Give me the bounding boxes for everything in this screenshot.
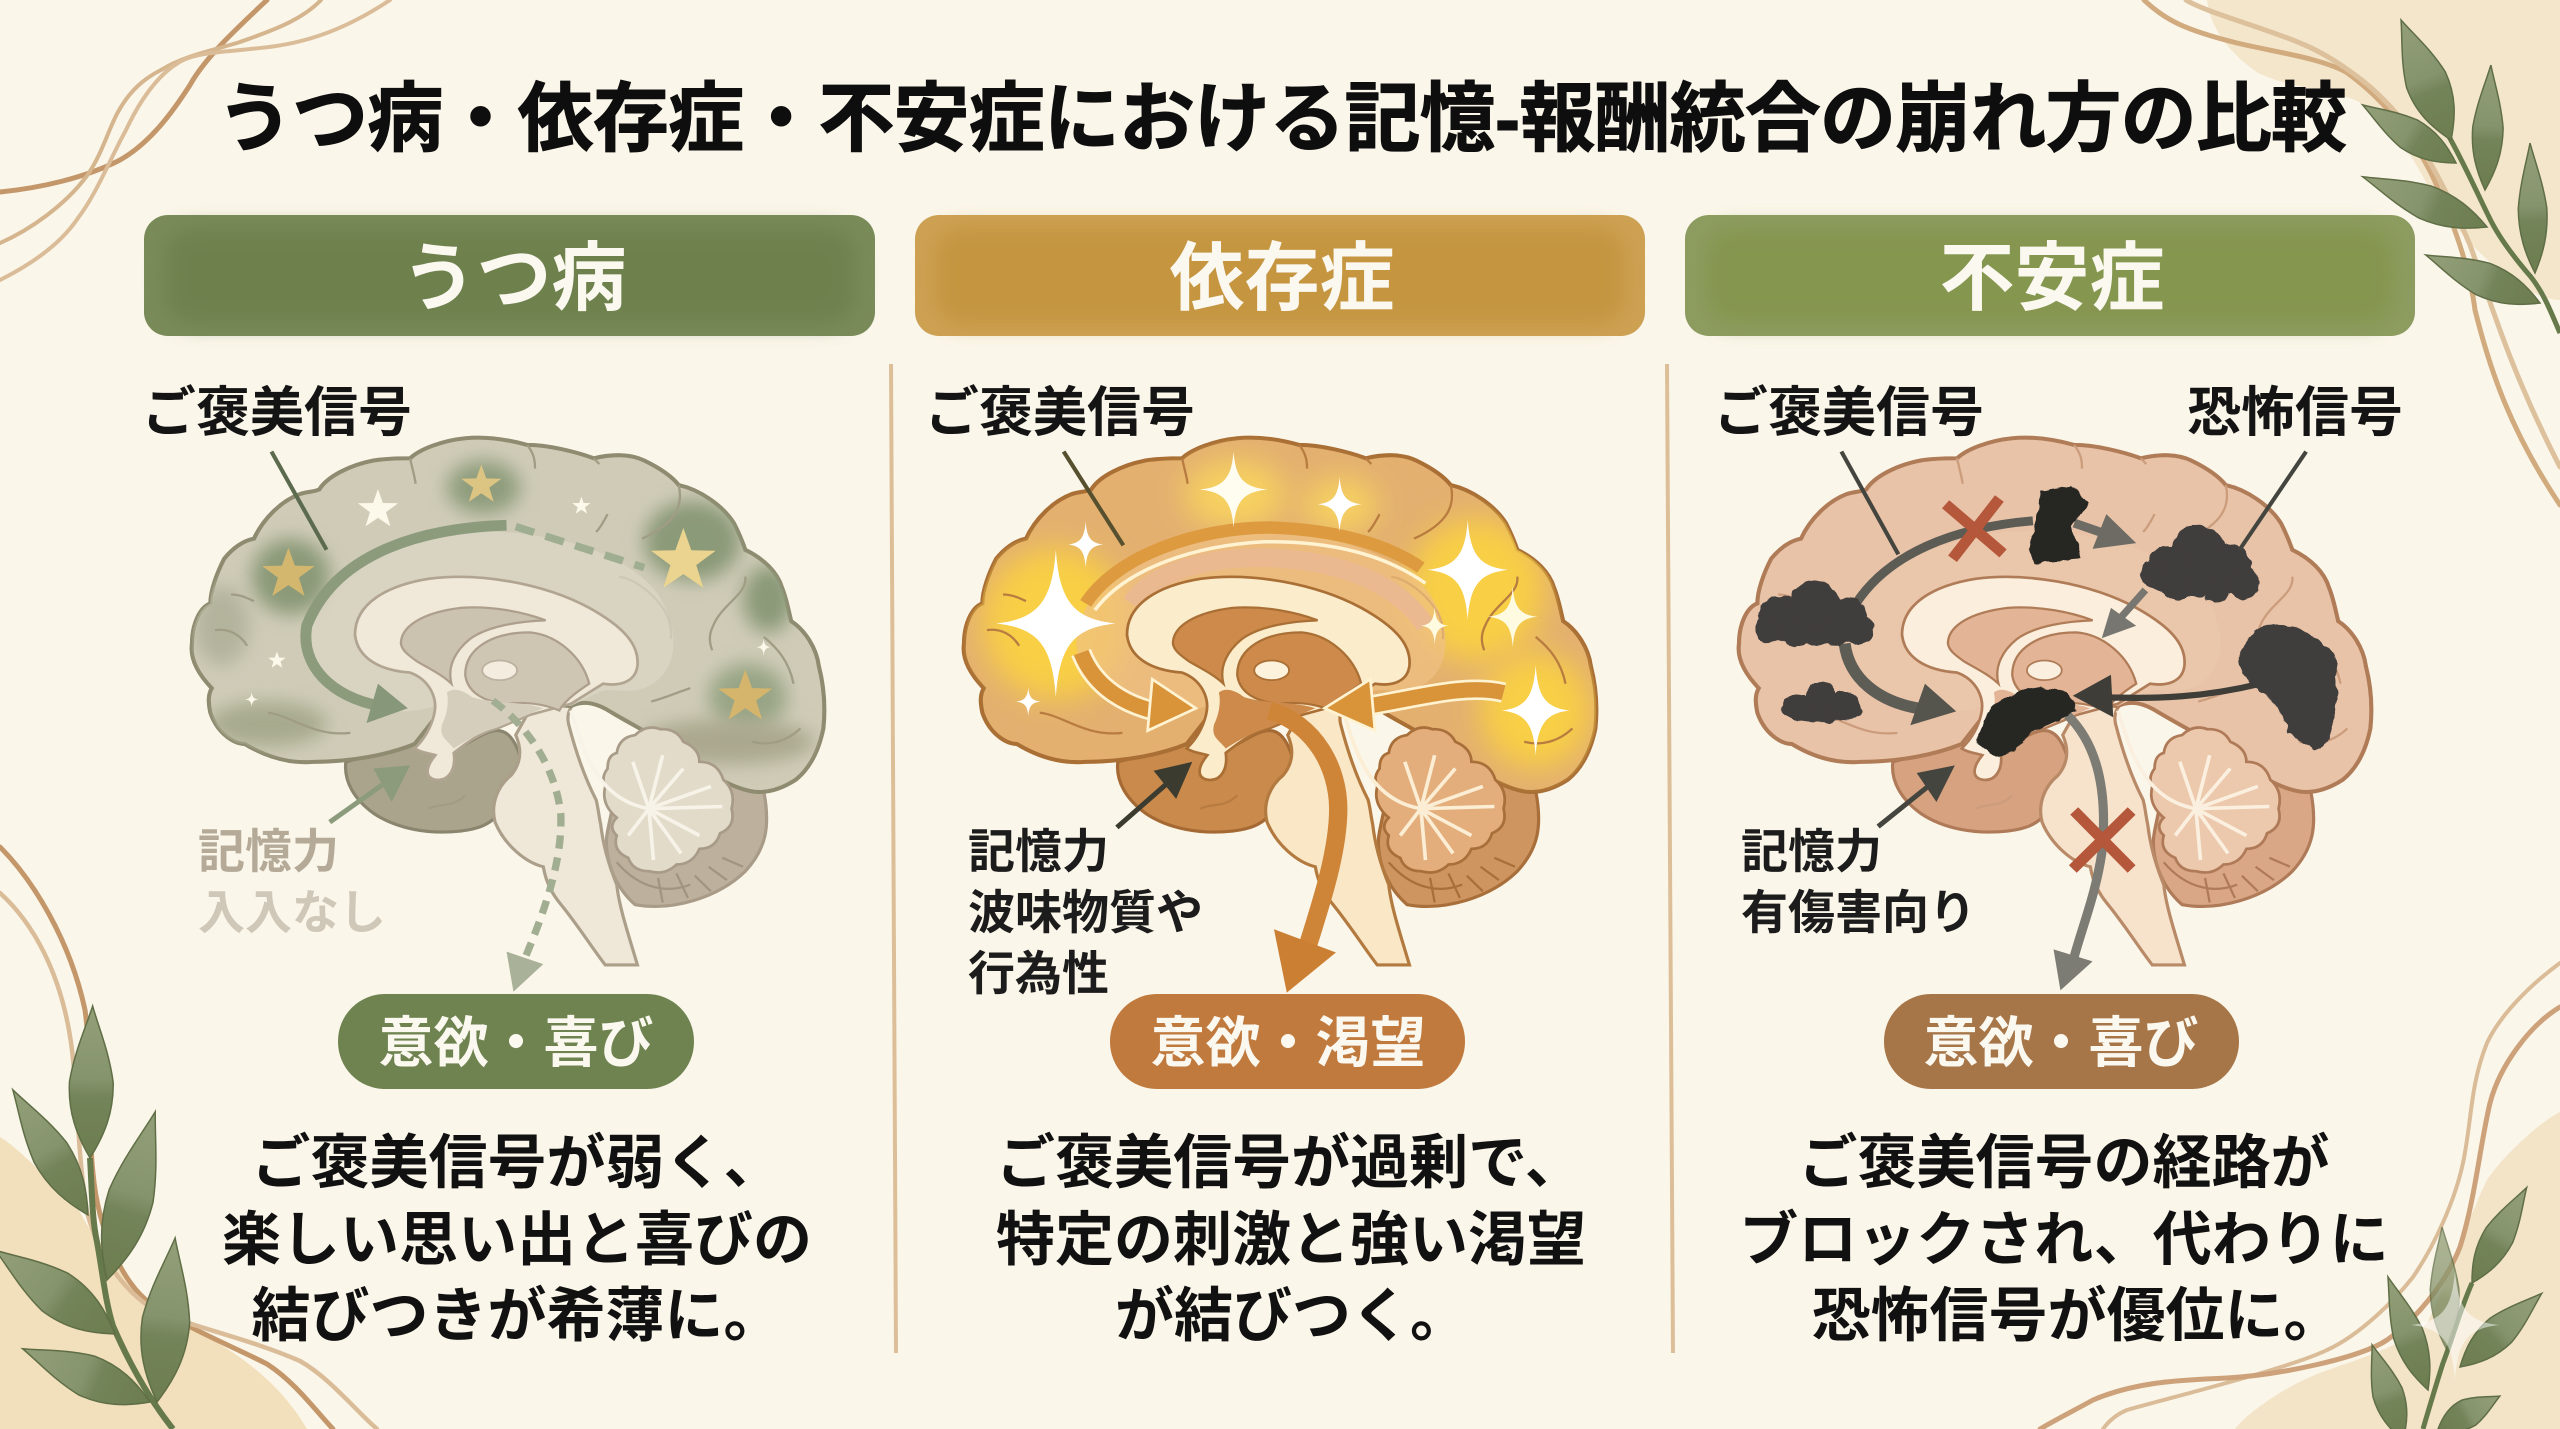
brain: depression (dulled, muted stars) [192, 438, 824, 992]
label: memory, substances and behaviours: 波味物質や [968, 886, 1203, 939]
label: memory, substances and behaviours: 行為性 [968, 947, 1109, 1000]
decoration: bottom-right wash, lines and leaves [2040, 963, 2560, 1429]
brain: anxiety (dark clouds, blocked paths) [1739, 438, 2371, 990]
decoration: bottom-left wash, lines and leaves [0, 847, 377, 1429]
header: 不安症 [1685, 215, 2415, 336]
description: ブロックされ、代わりに [1739, 1207, 2389, 1273]
sparkles [996, 452, 1570, 756]
leader lines [1841, 452, 2306, 554]
description: ご褒美信号が弱く、 [251, 1130, 783, 1196]
label: memory, harmful orientation: 有傷害向り [1741, 886, 1976, 939]
decoration: top-left curved lines [0, 0, 390, 280]
header: 依存症 [915, 215, 1645, 336]
panel: 不安症 [1685, 215, 2415, 1349]
leader line [271, 452, 327, 550]
label: reward signal: ご褒美信号 [1714, 383, 1984, 443]
dark fear clouds [1755, 525, 2337, 749]
description [1739, 1130, 2389, 1349]
description: ご褒美信号が過剰で、 [996, 1130, 1584, 1196]
pill: motivation and joy: 意欲・喜び [1923, 1012, 2199, 1074]
label: memory, no input [198, 825, 386, 939]
arrow: weak reward path [306, 525, 644, 723]
description: 結びつきが希薄に。 [251, 1283, 783, 1349]
label: reward signal: ご褒美信号 [925, 383, 1195, 443]
header: うつ病: うつ病 [401, 236, 627, 320]
arrow: memory input [330, 765, 410, 822]
panel: うつ病 [142, 215, 875, 1349]
arrow: faint dashed output to motivation [493, 701, 561, 992]
muted stars [245, 465, 772, 720]
brain: addiction (over-bright sparkles) [964, 438, 1596, 993]
description: 恐怖信号が優位に。 [1811, 1283, 2343, 1349]
pill: motivation and craving [1110, 994, 1465, 1089]
header: 不安症: 不安症 [1939, 236, 2165, 320]
arrows: strong inputs [1081, 652, 1504, 731]
pill: motivation and joy: 意欲・喜び [378, 1012, 654, 1074]
dark blockages [1978, 485, 2088, 755]
panel: 依存症 [915, 215, 1645, 1349]
description: が結びつく。 [1115, 1283, 1469, 1349]
pill: motivation and joy [1884, 994, 2239, 1089]
pill: motivation and joy [338, 994, 694, 1089]
arrowheads [1910, 514, 2136, 990]
label: fear signal: 恐怖信号 [2187, 383, 2403, 443]
description: 特定の刺激と強い渇望 [996, 1207, 1586, 1273]
label: memory, harmful orientation [1741, 825, 1976, 939]
description: 楽しい思い出と喜びの [222, 1207, 812, 1273]
leader line [1064, 452, 1123, 545]
title: うつ病・依存症・不安症における記憶-報酬統合の崩れ方の比較 [217, 77, 2347, 162]
pill: motivation and craving: 意欲・渇望 [1150, 1012, 1426, 1074]
arrows: reward path through clouds [1845, 521, 2260, 965]
blocked crosses [1946, 498, 2132, 869]
divider lines [891, 364, 1673, 1353]
label: memory, substances and behaviours: 記憶力 [968, 825, 1109, 878]
label: memory, no input: 入入なし [198, 886, 386, 939]
label: reward signal: ご褒美信号 [142, 383, 412, 443]
arrow: memory input [1117, 762, 1192, 827]
label: memory, no input: 記憶力 [198, 825, 339, 878]
arrow: strong output to craving [1269, 711, 1338, 993]
label: memory, harmful orientation: 記憶力 [1741, 825, 1882, 878]
label: memory, substances and behaviours [968, 825, 1203, 1000]
decoration: top-right wash, lines and leaves [2144, 0, 2560, 505]
description: ご褒美信号の経路が [1798, 1130, 2330, 1196]
header: うつ病 [144, 215, 875, 336]
description [996, 1130, 1586, 1349]
header: 依存症: 依存症 [1169, 236, 1395, 320]
description [222, 1130, 812, 1349]
